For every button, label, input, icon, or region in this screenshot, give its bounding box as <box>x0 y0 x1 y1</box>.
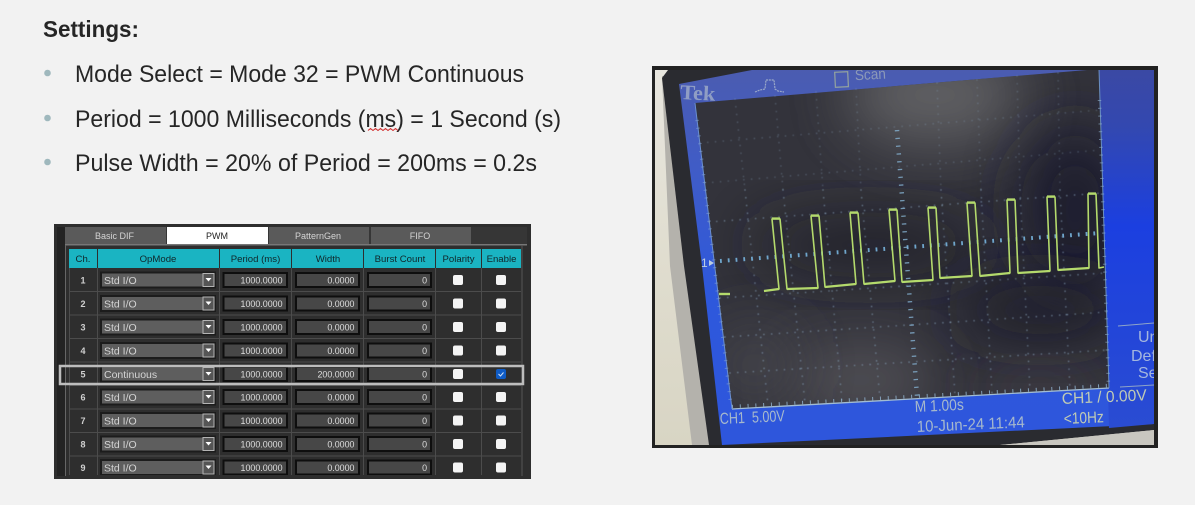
row 7: Std I/O <box>104 416 137 428</box>
row 2: 0 <box>422 299 427 309</box>
side menu: Se <box>1138 365 1158 382</box>
row 7: 7 <box>80 416 86 426</box>
row 3: 3 <box>80 322 86 332</box>
graticule dots <box>700 73 1108 405</box>
row 1: 1000.0000 <box>241 276 283 286</box>
row 9: 1000.0000 <box>241 463 283 473</box>
channel marker <box>702 258 714 267</box>
tab: Basic DIF <box>65 227 166 244</box>
table header row: Polarity <box>442 254 475 265</box>
row 4 <box>80 342 506 359</box>
tab: Basic DIF: Basic DIF <box>95 231 135 241</box>
heading: Settings: Settings: <box>43 16 139 42</box>
channel marker: 1 <box>701 256 708 270</box>
tab: PWM: PWM <box>206 231 228 241</box>
tab: PatternGen: PatternGen <box>295 231 341 241</box>
row 8: 8 <box>80 440 86 450</box>
panel: PWM settings table <box>54 224 531 479</box>
row 7 <box>80 412 506 429</box>
table body rows <box>69 268 521 476</box>
row 6: 6 <box>80 392 86 402</box>
readout: date: 10-Jun-24 11:44 <box>916 414 1025 436</box>
row 9: 0 <box>422 463 427 473</box>
row 5: continuous channel <box>80 366 506 382</box>
bullet: pulse width: Pulse Width = 20% of Period = 200ms = 0.2s <box>75 150 537 177</box>
row 8: Std I/O <box>104 439 137 451</box>
row 1: 0 <box>422 276 427 286</box>
row 9: Std I/O <box>104 462 137 474</box>
graticule background <box>696 70 1108 408</box>
row 4: 1000.0000 <box>241 346 283 356</box>
table header row: Burst Count <box>375 254 426 265</box>
row 1: 1 <box>80 276 86 286</box>
row 1 <box>80 272 506 288</box>
tab: FIFO <box>371 227 471 244</box>
row 1: 0.0000 <box>327 276 355 286</box>
row 3: Std I/O <box>104 322 137 334</box>
readout: channel scale: CH1 5.00V <box>719 408 785 428</box>
side menu: Un <box>1138 329 1158 346</box>
row 6: 1000.0000 <box>241 392 283 402</box>
row 2: 2 <box>80 299 86 309</box>
row 5 highlight box <box>60 366 523 384</box>
row 1: Std I/O <box>104 275 137 287</box>
row 8: 1000.0000 <box>241 440 283 450</box>
tab: PatternGen <box>269 227 369 244</box>
row 7: 1000.0000 <box>241 416 283 426</box>
readout: scan box <box>834 70 886 88</box>
row 5: continuous channel: 5 <box>80 370 86 380</box>
row 9 <box>80 459 506 476</box>
row 3: 0.0000 <box>327 322 355 332</box>
settings bullet list <box>44 61 561 177</box>
table header row: OpMode <box>140 254 176 265</box>
readout: scan box: Scan <box>854 66 886 84</box>
row 3: 1000.0000 <box>241 322 283 332</box>
waveform trace <box>719 194 1104 294</box>
row 3: 0 <box>422 322 427 332</box>
icon: trigger pulse <box>755 80 784 92</box>
row 7: 0.0000 <box>327 416 355 426</box>
row 8 <box>80 436 506 452</box>
tab: FIFO: FIFO <box>410 231 430 241</box>
row 5: continuous channel: 1000.0000 <box>241 370 283 380</box>
row 8: 0.0000 <box>327 440 355 450</box>
row 4: Std I/O <box>104 346 137 358</box>
screen blue area <box>679 60 1154 445</box>
row 6: 0 <box>422 392 427 402</box>
tab: PWM <box>167 227 268 244</box>
row 4: 0.0000 <box>327 346 355 356</box>
row 6: Std I/O <box>104 392 137 404</box>
table header row: Ch. <box>76 254 90 265</box>
wall <box>655 70 1154 445</box>
row 2: 0.0000 <box>327 299 355 309</box>
row 9: 9 <box>80 463 86 473</box>
graticule frame and ticks <box>695 69 1109 409</box>
row 7: 0 <box>422 416 427 426</box>
row 8: 0 <box>422 440 427 450</box>
table header row: Enable <box>487 254 516 265</box>
row 5: continuous channel: 200.0000 <box>317 370 355 380</box>
bullet: period: Period = 1000 Milliseconds (ms) = 1 Second (s) <box>75 106 561 133</box>
table header row: Width <box>316 254 340 265</box>
side menu: Def <box>1131 348 1156 365</box>
table header row <box>69 249 521 268</box>
table header row: Period (ms) <box>231 254 280 265</box>
bullet: mode select: Mode Select = Mode 32 = PWM Continuous <box>75 61 524 88</box>
scope readouts <box>680 66 1158 436</box>
row 4: 0 <box>422 346 427 356</box>
row 9: 0.0000 <box>327 463 355 473</box>
row 6: 0.0000 <box>327 392 355 402</box>
row 5: continuous channel: Continuous <box>104 369 157 381</box>
readout: Tek logo: Tek <box>680 80 716 106</box>
row 3 <box>80 318 506 336</box>
readout: trigger level: CH1 / 0.00V <box>1061 387 1147 408</box>
side menu <box>1118 323 1158 387</box>
graticule centre axes <box>720 130 1100 396</box>
row 6 <box>80 388 506 406</box>
readout: frequency: <10Hz <box>1063 409 1104 428</box>
row 5: continuous channel: 0 <box>422 370 427 380</box>
row 2 <box>80 295 506 312</box>
tab bar <box>65 227 527 244</box>
row 2: Std I/O <box>104 298 137 310</box>
scope bezel <box>662 76 712 445</box>
row 4: 4 <box>80 346 86 356</box>
row 2: 1000.0000 <box>241 299 283 309</box>
readout: timebase: M 1.00s <box>914 397 964 416</box>
panel: oscilloscope photo <box>652 45 1158 448</box>
